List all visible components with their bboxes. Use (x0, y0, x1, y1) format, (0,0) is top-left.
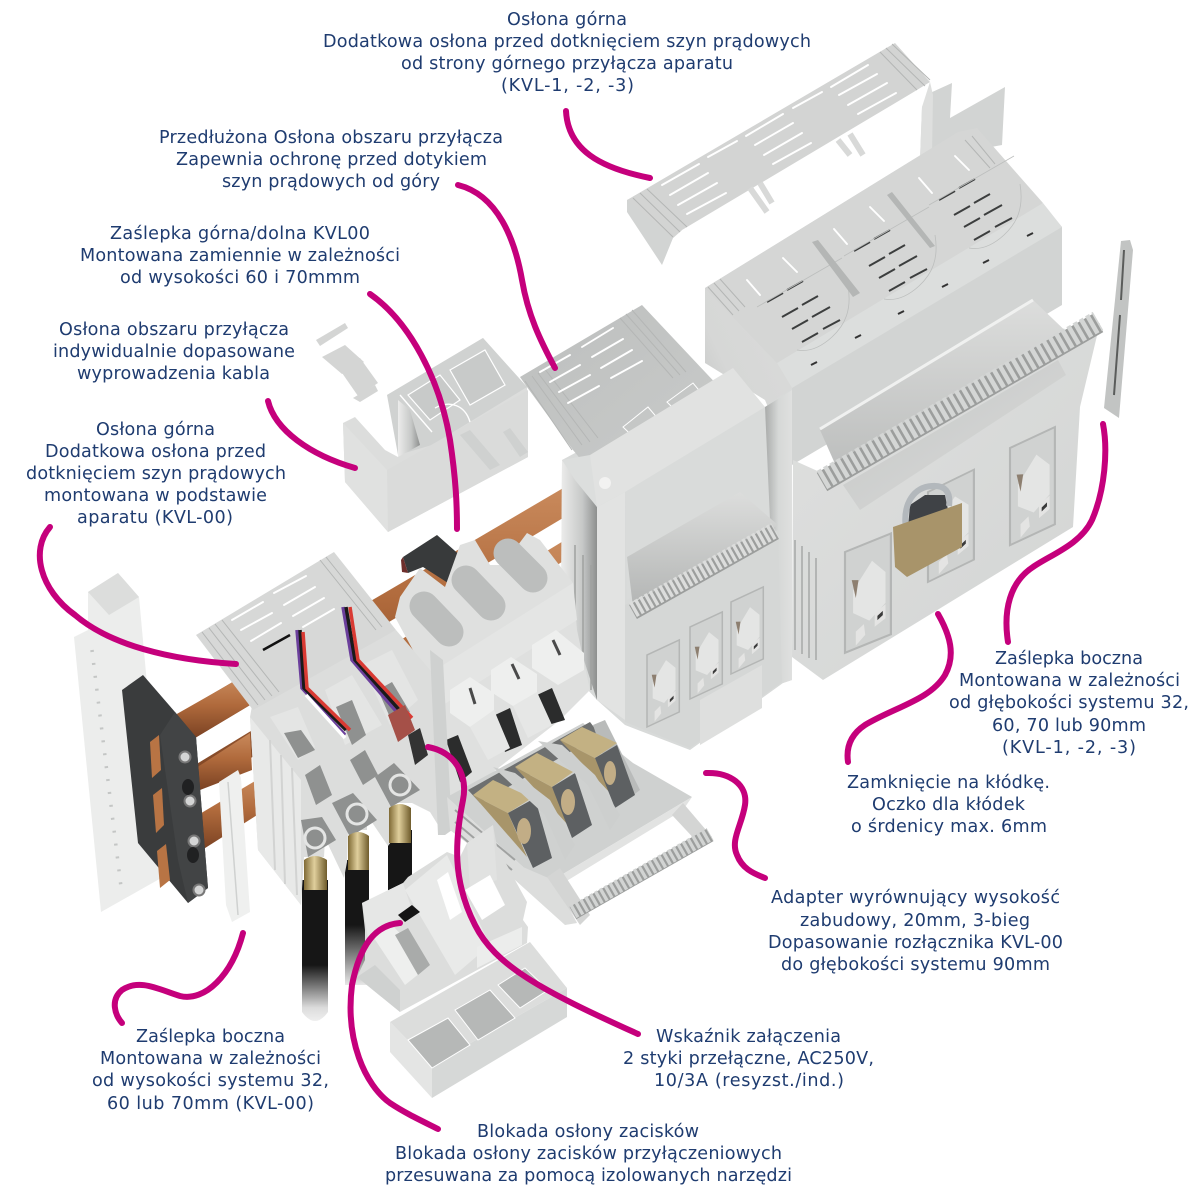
text: blank KVL00: Montowana zamiennie w zależności (80, 246, 400, 266)
pointer: upper cover KVL-00 (40, 527, 236, 664)
text: terminal cover lock: Blokada osłony zacisków (477, 1122, 699, 1142)
text: right side blank: od głębokości systemu 32, (949, 693, 1189, 713)
component: KVL00 left module (196, 552, 452, 905)
brass cable ferrules (304, 804, 411, 890)
component: main switch body KVL top (705, 128, 1062, 465)
body (561, 388, 792, 750)
text: right side blank: Montowana w zależności (959, 671, 1180, 691)
ribbed handle (822, 321, 1098, 482)
component: KVL00 fuse block (395, 533, 590, 835)
text: adapter: Dopasowanie rozłącznika KVL-00 (768, 933, 1063, 953)
top cover plate (520, 305, 722, 467)
text: extended cover: szyn prądowych od góry (222, 172, 440, 192)
mounting plate behind upper cover (920, 83, 1005, 160)
text: upper cover (323, 10, 811, 96)
pointer: extended connection cover (458, 185, 555, 368)
text: upper cover KVL-00: aparatu (KVL-00) (77, 508, 233, 528)
component: upper cover KVL-1,-2,-3 (627, 43, 933, 265)
white pull tabs and black blades (446, 630, 584, 782)
text: terminal cover lock (385, 1122, 792, 1186)
text: upper cover KVL-00 (26, 420, 286, 528)
pointer: terminal cover lock (351, 923, 438, 1129)
text: adapter: zabudowy, 20mm, 3-bieg (800, 911, 1030, 931)
pointer: upper cover (566, 111, 650, 178)
text: right side blank (949, 649, 1189, 758)
text: switch indicator: Wskaźnik załączenia (656, 1027, 841, 1047)
text: upper cover KVL-00: dotknięciem szyn prądowych (26, 464, 286, 484)
component: connection area cover with blanks (316, 323, 528, 532)
text: right side blank: 60, 70 lub 90mm (992, 716, 1146, 736)
fuse windows (647, 587, 763, 727)
compartments (270, 650, 418, 760)
text: connection area cover: wyprowadzenia kabla (77, 364, 270, 384)
component: left mounting rail (74, 573, 163, 912)
text: upper cover: (KVL-1, -2, -3) (501, 76, 634, 96)
text: left side blank: Montowana w zależności (100, 1049, 321, 1069)
text: connection area cover: Osłona obszaru przyłącza (59, 320, 289, 340)
text: upper cover KVL-00: montowana w podstawie (44, 486, 267, 506)
pointer: adapter (706, 773, 765, 878)
small blanking pieces (316, 323, 378, 402)
pointer: connection area cover (268, 401, 355, 468)
top cover plate (196, 552, 396, 710)
text: terminal cover lock: Blokada osłony zacisków przyłączeniowych (395, 1144, 782, 1164)
text: right side blank: (KVL-1, -2, -3) (1002, 738, 1136, 758)
text: switch indicator (623, 1027, 874, 1091)
control handle stub (403, 535, 463, 583)
side blanking strip left (219, 770, 250, 922)
text: right side blank: Zaślepka boczna (995, 649, 1143, 669)
pointer: left side blank (115, 933, 243, 1023)
text: connection area cover (53, 320, 295, 384)
text: switch indicator: 10/3A (resyzst./ind.) (654, 1071, 844, 1091)
text: adapter: do głębokości systemu 90mm (781, 955, 1050, 975)
text: upper cover KVL-00: Osłona górna (96, 420, 215, 440)
text: blank KVL00 (80, 224, 400, 288)
dark inner fins and gold contacts (468, 720, 640, 868)
coloured wires (297, 607, 412, 738)
U-shaped terminal openings (424, 553, 533, 632)
text: adapter: Adapter wyrównujący wysokość (771, 888, 1060, 908)
text: padlock closure: Oczko dla kłódek (872, 795, 1026, 815)
terminal bases (301, 763, 420, 857)
text: blank KVL00: Zaślepka górna/dolna KVL00 (110, 224, 370, 244)
component: lower terminal cover tray (390, 942, 567, 1098)
front frame (590, 368, 765, 507)
left ribs (795, 540, 816, 660)
component: black busbar terminal block (122, 675, 208, 903)
text: upper cover: Dodatkowa osłona przed dotknięciem szyn prądowych (323, 32, 811, 52)
text: adapter (768, 888, 1063, 975)
pointer: right side blank (1006, 424, 1105, 642)
text: left side blank: od wysokości systemu 32, (92, 1071, 329, 1091)
text: left side blank: 60 lub 70mm (KVL-00) (107, 1094, 314, 1114)
icon: padlock (893, 486, 962, 577)
text: upper cover: od strony górnego przyłącza aparatu (401, 54, 733, 74)
text: padlock closure: Zamknięcie na kłódkę. (847, 773, 1050, 793)
pointer: KVL00 blank (370, 294, 457, 529)
cables (302, 830, 412, 1021)
text: connection area cover: indywidualnie dopasowane (53, 342, 295, 362)
component: middle switch module KVL (520, 305, 792, 750)
text: blank KVL00: od wysokości 60 i 70mmm (120, 268, 360, 288)
component: terminal cover lock module (357, 825, 528, 1012)
text: padlock closure: o śrdenicy max. 6mm (851, 817, 1047, 837)
pointer: padlock closure (848, 614, 951, 762)
component: height adapter with fold-out handle (447, 720, 712, 925)
text: terminal cover lock: przesuwana za pomocą izolowanych narzędzi (385, 1166, 792, 1186)
text: upper cover KVL-00: Dodatkowa osłona przed (45, 442, 266, 462)
component: main switch fuse cover with handle (792, 300, 1100, 680)
side blanking strip right (1104, 240, 1133, 418)
text: padlock closure (847, 773, 1050, 837)
text: upper cover: Osłona górna (507, 10, 627, 30)
text: left side blank: Zaślepka boczna (136, 1027, 285, 1047)
terminal screws (305, 775, 410, 848)
fuse windows (845, 427, 1055, 653)
copper busbars (173, 487, 568, 850)
tile pattern on top of body (708, 136, 1033, 365)
text: extended cover: Zapewnia ochronę przed dotykiem (176, 150, 487, 170)
text: switch indicator: 2 styki przełączne, AC250V, (623, 1049, 874, 1069)
ribbed handle (633, 530, 775, 612)
component: front busbars visible (175, 678, 252, 790)
text: extended cover (159, 128, 503, 192)
text: left side blank (92, 1027, 329, 1114)
pointer: switch indicator (428, 747, 638, 1034)
text: extended cover: Przedłużona Osłona obszaru przyłącza (159, 128, 503, 148)
ribbed handle (547, 803, 712, 925)
